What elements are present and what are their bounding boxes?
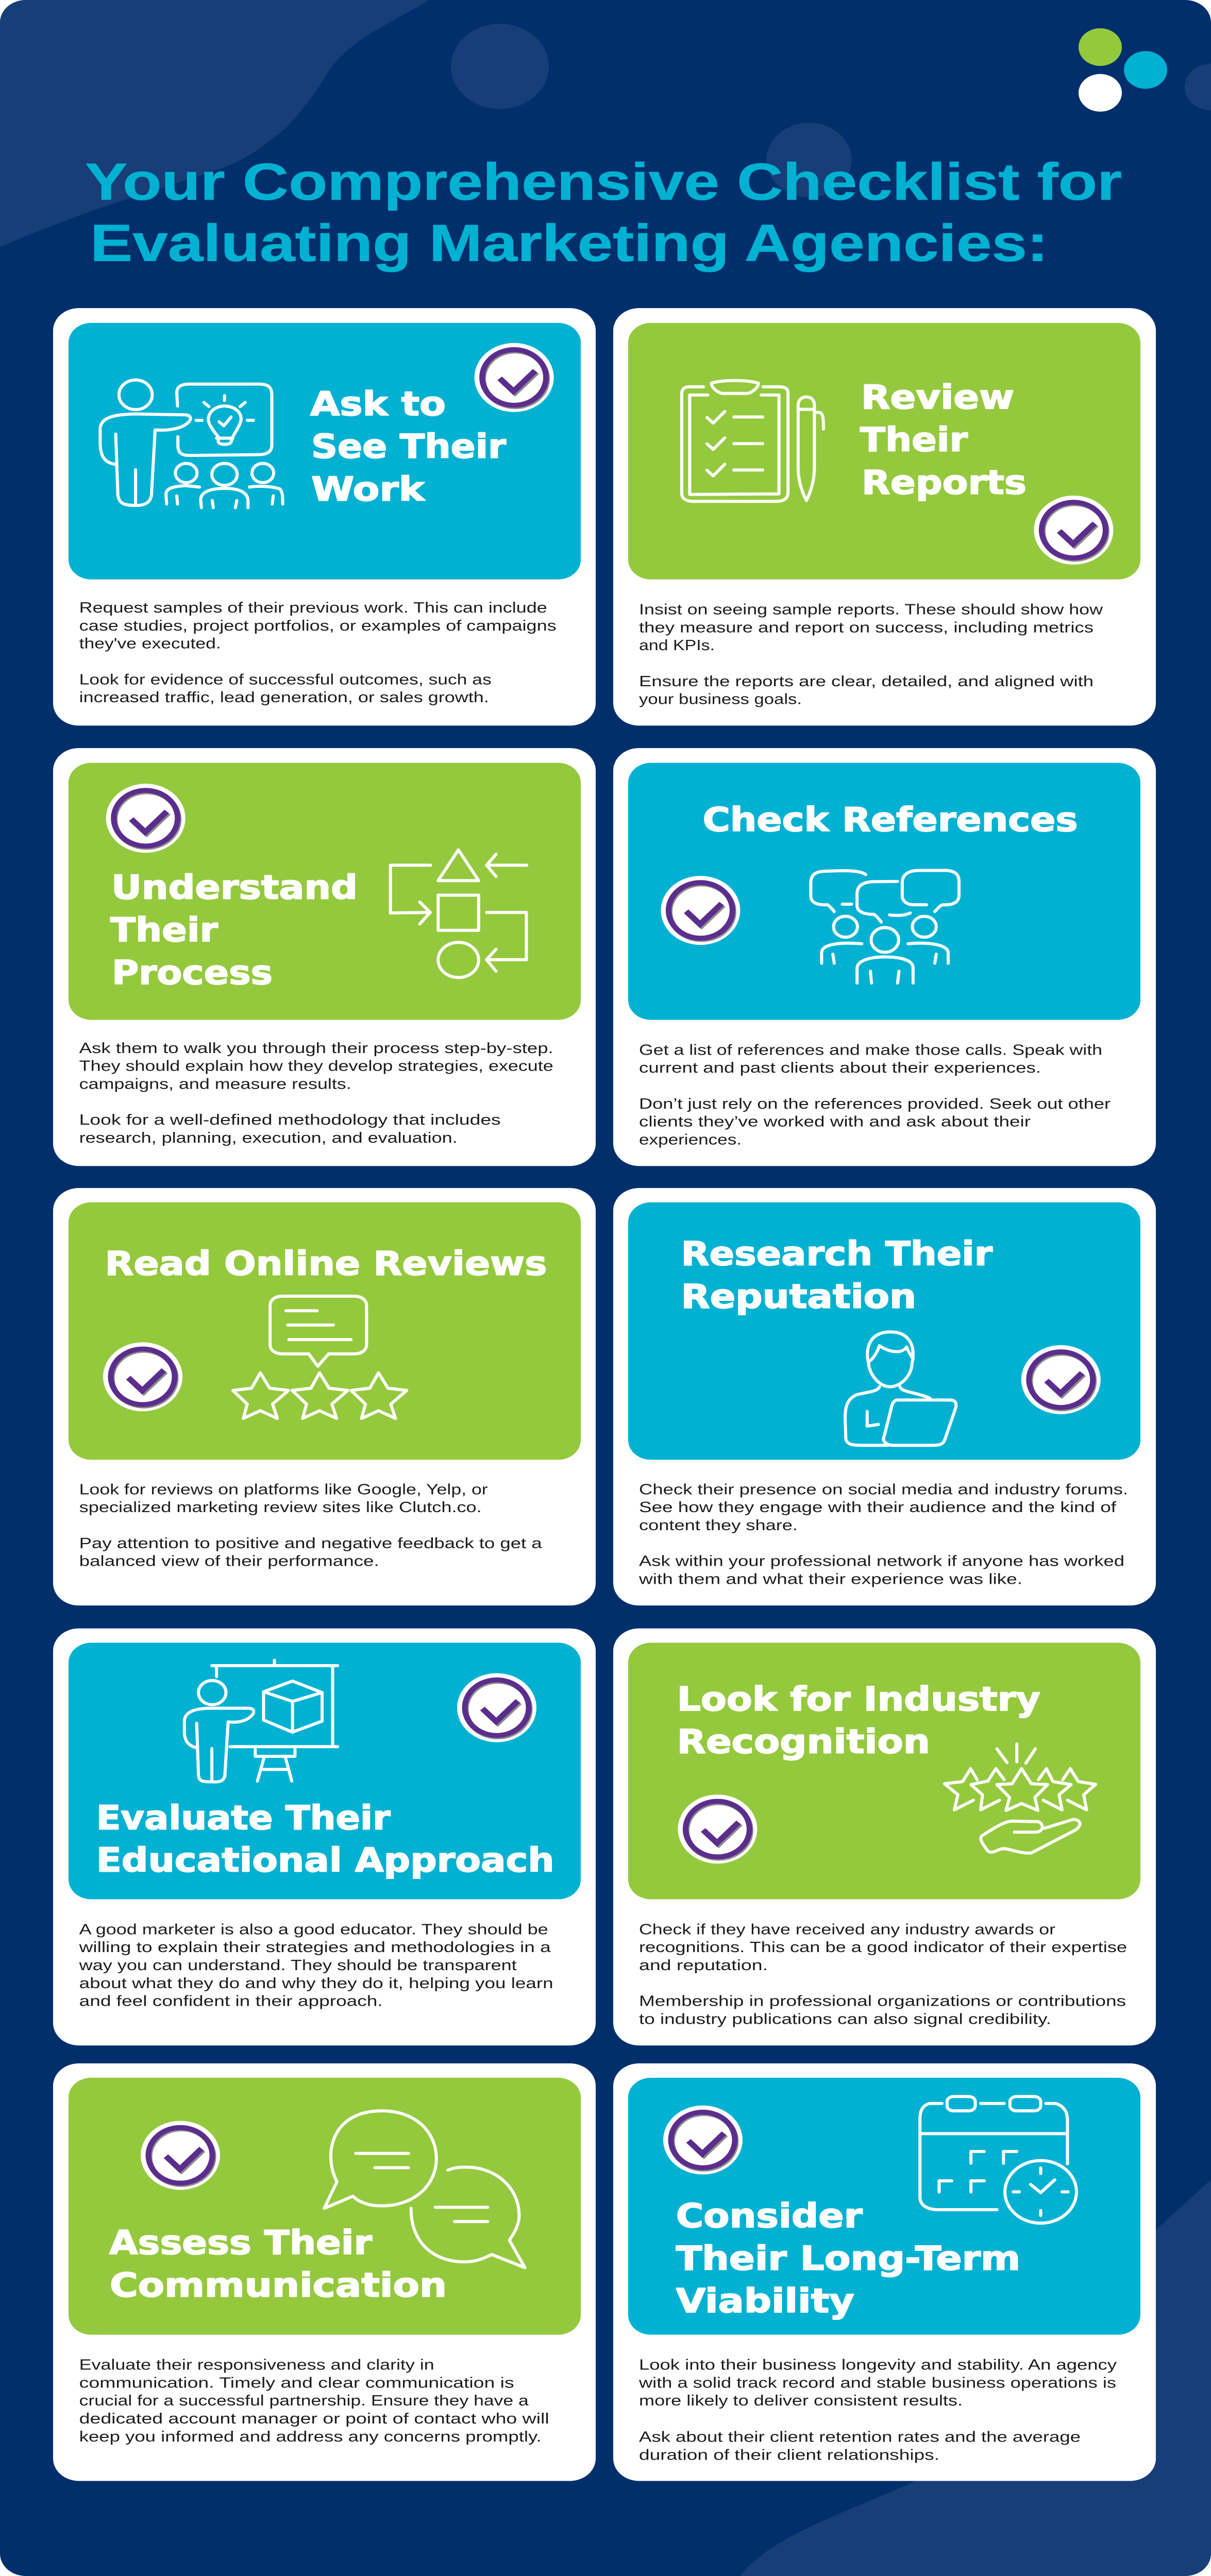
heading: Viability <box>676 2282 854 2320</box>
heading: Process <box>112 954 273 992</box>
icon: people with speech bubbles <box>811 870 959 983</box>
heading: See Their <box>311 428 506 466</box>
panel: Read Online Reviews <box>53 1188 596 1605</box>
card background <box>53 748 596 1166</box>
header panel <box>628 763 1140 1020</box>
body text: recognitions. This can be a good indicator of their expertise <box>639 1939 1127 1956</box>
icon: check badge <box>103 1342 182 1411</box>
body text: to industry publications can also signal credibility. <box>639 2010 1051 2027</box>
heading: Reports <box>862 464 1027 502</box>
panel: Research Their Reputation <box>613 1188 1156 1605</box>
heading: Understand <box>111 869 358 907</box>
body text: balanced view of their performance. <box>79 1553 379 1569</box>
card background <box>53 1188 596 1605</box>
header panel <box>69 763 581 1020</box>
heading: Ask to <box>310 385 446 423</box>
card background <box>613 748 1156 1166</box>
panel: Consider Their Long-Term Viability <box>613 2063 1156 2481</box>
heading <box>310 385 506 509</box>
icon: check badge <box>661 876 740 945</box>
body text: dedicated account manager or point of contact who will <box>79 2410 549 2427</box>
body text <box>638 1481 1128 1587</box>
background swoosh top left <box>0 0 429 247</box>
body text: Look into their business longevity and stability. An agency <box>639 2357 1117 2373</box>
body text: They should explain how they develop strategies, execute <box>79 1058 553 1074</box>
card background <box>53 1629 596 2045</box>
background circle one <box>451 24 549 109</box>
heading: Work <box>311 470 426 509</box>
body text: and KPIs. <box>639 637 715 654</box>
header panel <box>628 1202 1140 1460</box>
card background <box>613 308 1156 725</box>
icon: check badge <box>475 343 554 412</box>
body text: Look for evidence of successful outcomes, such as <box>79 671 492 688</box>
heading: Communication <box>110 2266 447 2304</box>
heading <box>110 869 358 992</box>
icon: stars above open hand <box>945 1744 1096 1853</box>
body text: Ask about their client retention rates and the average <box>639 2429 1081 2445</box>
icon: check badge <box>141 2121 220 2190</box>
panel: Assess Their Communication <box>53 2063 596 2481</box>
body text: Ensure the reports are clear, detailed, and aligned with <box>639 673 1094 689</box>
panel: Look for Industry Recognition <box>613 1629 1156 2045</box>
heading: Their <box>110 911 218 950</box>
body text: they measure and report on success, including metrics <box>639 619 1094 636</box>
body text: Check their presence on social media and industry forums. <box>639 1481 1128 1498</box>
body text: content they share. <box>639 1517 798 1534</box>
heading <box>860 379 1027 502</box>
body text: willing to explain their strategies and methodologies in a <box>79 1939 551 1956</box>
body text: your business goals. <box>639 691 802 707</box>
body text: they've executed. <box>79 635 221 652</box>
card background <box>613 1629 1156 2045</box>
icon: process flow shapes <box>391 850 527 977</box>
heading: Look for Industry <box>677 1680 1040 1719</box>
body text <box>639 601 1103 707</box>
header panel <box>628 2078 1140 2335</box>
icon: check badge <box>1034 496 1113 565</box>
heading: Their <box>860 421 968 459</box>
body text: experiences. <box>639 1131 742 1148</box>
body text <box>639 1041 1111 1148</box>
body text: Request samples of their previous work. This can include <box>79 599 547 616</box>
body text: duration of their client relationships. <box>639 2447 939 2463</box>
header panel <box>69 2078 581 2335</box>
heading <box>96 1799 554 1879</box>
body text: way you can understand. They should be transparent <box>79 1957 517 1973</box>
header panel <box>628 323 1140 580</box>
body text: Look for a well-defined methodology that includes <box>79 1111 501 1128</box>
body text: specialized marketing review sites like Clutch.co. <box>79 1499 482 1516</box>
panel: Understand Their Process <box>53 748 596 1166</box>
icon: clipboard and pen <box>682 381 823 501</box>
body text: Don’t just rely on the references provided. Seek out other <box>639 1095 1111 1112</box>
panel: Ask to See Their Work <box>53 308 596 725</box>
heading: Consider <box>676 2197 863 2235</box>
body text: increased traffic, lead generation, or sales growth. <box>79 689 489 706</box>
body text <box>79 1481 543 1569</box>
body text: keep you informed and address any concerns promptly. <box>79 2428 542 2445</box>
panel: Evaluate Their Educational Approach <box>53 1629 596 2045</box>
body text: Evaluate their responsiveness and clarity in <box>79 2357 434 2373</box>
body text <box>79 2357 549 2445</box>
heading: Reputation <box>681 1278 916 1316</box>
icon: check badge <box>663 2106 743 2175</box>
icon: presenter with light bulb <box>100 380 283 507</box>
body text: Pay attention to positive and negative feedback to get a <box>79 1535 543 1551</box>
heading: Educational Approach <box>96 1841 554 1879</box>
body text <box>79 1921 553 2009</box>
icon: check badge <box>678 1794 757 1863</box>
header panel <box>69 1202 581 1460</box>
body text: Get a list of references and make those calls. Speak with <box>639 1041 1102 1058</box>
body text: Look for reviews on platforms like Google, Yelp, or <box>79 1481 488 1498</box>
heading: Review <box>861 379 1014 417</box>
body text <box>79 599 557 706</box>
body text: case studies, project portfolios, or examples of campaigns <box>79 617 557 634</box>
icon: calendar with clock <box>920 2096 1077 2223</box>
body text <box>639 1921 1127 2027</box>
header panel <box>69 1643 581 1899</box>
heading: Their Long-Term <box>676 2240 1020 2278</box>
body text: with them and what their experience was like. <box>638 1571 1022 1587</box>
body text: A good marketer is also a good educator. They should be <box>79 1921 548 1938</box>
body text: and feel confident in their approach. <box>79 1993 383 2009</box>
background swoosh bottom right <box>740 2180 1211 2576</box>
body text: and reputation. <box>639 1957 768 1973</box>
body text: research, planning, execution, and evaluation. <box>79 1129 458 1146</box>
body text: Insist on seeing sample reports. These should show how <box>639 601 1103 618</box>
card background <box>53 308 596 725</box>
icon: check badge <box>106 784 186 853</box>
body text: Ask within your professional network if anyone has worked <box>639 1553 1124 1569</box>
body text: with a solid track record and stable business operations is <box>638 2374 1116 2391</box>
card background <box>613 1188 1156 1605</box>
body text <box>79 1040 553 1146</box>
logo dots <box>1079 28 1167 112</box>
title: Evaluating Marketing Agencies: <box>90 215 1048 273</box>
body text: Membership in professional organizations or contributions <box>639 1993 1126 2009</box>
heading: Check References <box>703 801 1078 839</box>
icon: person with laptop <box>845 1332 956 1445</box>
icon: review bubble and stars <box>233 1296 407 1418</box>
icon: check badge <box>457 1673 536 1742</box>
title: Your Comprehensive Checklist for <box>85 153 1122 211</box>
body text: about what they do and why they do it, helping you learn <box>79 1975 553 1991</box>
icon: two speech bubbles <box>324 2111 525 2268</box>
body text: Ask them to walk you through their process step-by-step. <box>79 1040 553 1056</box>
heading: Assess Their <box>109 2224 372 2262</box>
body text: more likely to deliver consistent results. <box>639 2392 963 2409</box>
heading <box>677 1680 1040 1761</box>
panel: Review Their Reports <box>613 308 1156 725</box>
body text: communication. Timely and clear communication is <box>79 2374 514 2391</box>
heading: Research Their <box>681 1235 993 1273</box>
icon: teacher at projection screen with cube <box>184 1660 338 1782</box>
heading <box>681 1235 993 1316</box>
body text: See how they engage with their audience and the kind of <box>639 1499 1116 1516</box>
card background <box>53 2063 596 2481</box>
body text: clients they’ve worked with and ask about their <box>639 1113 1031 1130</box>
header panel <box>628 1643 1140 1899</box>
heading: Recognition <box>677 1723 930 1761</box>
body text: current and past clients about their experiences. <box>639 1059 1041 1076</box>
panel: Check References <box>613 748 1156 1166</box>
body text: crucial for a successful partnership. Ensure they have a <box>79 2392 529 2409</box>
heading <box>676 2197 1020 2320</box>
body text <box>638 2357 1117 2463</box>
background circle three <box>1185 64 1211 110</box>
title <box>85 153 1122 273</box>
body text: Check if they have received any industry awards or <box>639 1921 1055 1938</box>
heading: Evaluate Their <box>96 1799 391 1837</box>
heading: Read Online Reviews <box>105 1245 547 1283</box>
card background <box>613 2063 1156 2481</box>
icon: check badge <box>1021 1345 1101 1414</box>
body text: campaigns, and measure results. <box>79 1076 351 1092</box>
header panel <box>69 323 581 580</box>
heading <box>109 2224 447 2304</box>
background circle two <box>766 123 852 197</box>
